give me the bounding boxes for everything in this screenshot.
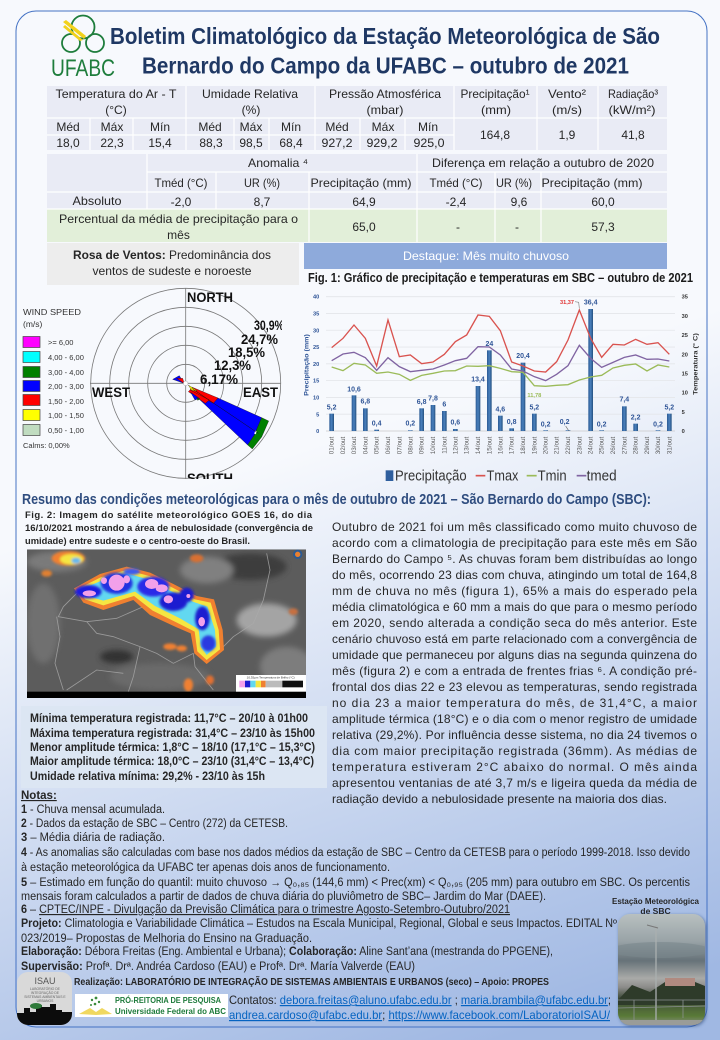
data labels: 0,6 — [450, 420, 460, 427]
day labels: 15/out — [486, 436, 493, 454]
icon: UFABC logo: UFABC — [51, 55, 115, 82]
day labels: 23/out — [576, 436, 583, 454]
day labels: 30/out — [655, 436, 662, 454]
line: Tmax — [332, 310, 669, 372]
table: anomalies: -2,0 — [171, 195, 192, 209]
table: monthly summary: 164,8 — [480, 128, 510, 142]
left axis: 5 — [316, 412, 319, 418]
table: monthly summary: (mm) — [481, 103, 511, 117]
table: monthly summary: 15,4 — [148, 136, 172, 150]
day labels: 02/out — [340, 436, 347, 454]
left axis: Precipitação (mm) — [304, 334, 310, 396]
table: monthly summary: Umidade Relativa — [202, 87, 298, 101]
text block: figure 2 caption — [25, 510, 313, 547]
text block: contacts: andrea.cardoso@ufabc.edu.br; https://www.facebook.com/LaboratorioISAU/ — [229, 1008, 611, 1022]
table: anomalies — [47, 154, 667, 242]
table: monthly summary: Méd — [325, 120, 349, 134]
table: monthly summary: (°C) — [105, 103, 127, 117]
day labels: 31/out — [666, 436, 673, 454]
text block: wind rose note: ventos de sudeste e noroeste — [92, 264, 252, 278]
wind rose dial: NORTH — [187, 290, 233, 305]
data labels: 36,4 — [584, 299, 598, 306]
legend: wind speed: WIND SPEED — [23, 307, 81, 317]
panel: temperature records: Mínima temperatura registrada: 11,7°C – 20/10 à 01h00 — [30, 713, 308, 725]
panel: temperature records: Umidade relativa mínima: 29,2% - 23/10 às 15h — [30, 771, 265, 783]
data labels: 0,2 — [560, 419, 570, 426]
legend: wind speed: 0,50 - 1,00 — [48, 426, 84, 435]
day labels: 01/out — [329, 436, 336, 454]
storm band — [74, 567, 224, 664]
icon: ISAU logo — [17, 972, 72, 1025]
panel: temperature records: Maior amplitude térmica: 18,0°C – 23/10 (31,4°C – 13,4°C) — [30, 756, 314, 768]
day labels — [329, 436, 673, 454]
table: monthly summary: 18,0 — [56, 136, 80, 150]
table: monthly summary: (kW/m²) — [608, 103, 656, 117]
text block: main analysis: apresentou ventanias de até 3,7 m/s e ligeira queda da média de — [332, 776, 697, 790]
icon: ISAU logo: ISAU — [34, 976, 56, 986]
table: anomalies: 60,0 — [591, 195, 615, 209]
table: monthly summary: Vento² — [548, 87, 586, 101]
text block: notes: à estação meteorológica da UFABC ter apenas dois anos de funcionamento. — [21, 862, 390, 874]
table: anomalies: - — [456, 220, 460, 234]
left axis: 15 — [313, 379, 319, 385]
legend: wind speed: 3,00 - 4,00 — [48, 368, 84, 377]
day labels: 27/out — [621, 436, 628, 454]
wind rose dial: 30,9% — [254, 318, 284, 333]
right axis: 20 — [682, 352, 688, 358]
text block: notes — [21, 790, 690, 916]
text block: main analysis: do mês, ocorrendo 23 dias com chuva, atingindo um total de 164,8 — [332, 568, 697, 582]
title: Bernardo do Campo da UFABC – outubro de 2021 — [142, 52, 629, 78]
right axis: 15 — [682, 372, 688, 378]
wind rose dial — [90, 288, 284, 486]
icon: ISAU logo: LABORATÓRIO DE — [30, 986, 61, 991]
right axis: 35 — [682, 295, 688, 301]
text block: station caption: de SBC — [640, 906, 671, 916]
text block: main analysis: temperatura estiveram 2°C abaixo do normal. O mês ainda — [332, 760, 697, 774]
table: anomalies: UR (%) — [244, 176, 280, 190]
text block: notes: 5 – Estimado em função do quantil: muito chuvoso → Q₀,₈₅ (144,6 mm) < Prec(xm) < Q₀,₉₅ (205 mm) para outubro em SBC. Os percentis — [21, 877, 690, 889]
text block: notes: 6 – CPTEC/INPE - Divulgação da Previsão Climática para o trimestre Agosto-Setembro-Outubro/2021 — [21, 904, 510, 916]
day labels: 19/out — [531, 436, 538, 454]
data labels: 6 — [442, 402, 446, 409]
chart: wind rose — [23, 288, 284, 486]
icon: ISAU logo: SISTEMAS AMBIENTAIS E — [24, 995, 66, 999]
table: monthly summary: Radiação³ — [608, 87, 658, 101]
chart legend: Tmin — [538, 469, 567, 485]
table: monthly summary: 929,2 — [366, 136, 398, 150]
day labels: 16/out — [497, 436, 504, 454]
table: anomalies: Anomalia ⁴ — [248, 156, 308, 170]
left axis: 10 — [313, 395, 319, 401]
table: monthly summary: Mín — [150, 120, 170, 134]
text block: wind rose note — [47, 243, 299, 285]
data labels: 20,4 — [516, 353, 530, 360]
table: monthly summary: Máx — [101, 120, 123, 134]
day labels: 04/out — [362, 436, 369, 454]
wind rose dial: 6,17% — [200, 372, 238, 387]
title: Boletim Climatológico da Estação Meteorológica de São — [110, 23, 660, 49]
table: monthly summary: 68,4 — [279, 136, 303, 150]
day labels: 13/out — [464, 436, 471, 454]
table: monthly summary: Méd — [198, 120, 222, 134]
text block: notes: 2 - Dados da estação de SBC – Centro (272) da CETESB. — [21, 818, 288, 830]
image: GOES 16 satellite — [27, 549, 313, 698]
icon: PROPES logo — [75, 994, 228, 1017]
left axis: 20 — [313, 362, 319, 368]
table: monthly summary: (mbar) — [366, 103, 404, 117]
day labels: 20/out — [543, 436, 550, 454]
legend: wind speed: >= 6,00 — [48, 338, 73, 347]
data labels: 6,8 — [360, 398, 370, 405]
legend: wind speed: 1,00 - 1,50 — [48, 411, 84, 420]
table: monthly summary: Temperatura do Ar - T — [56, 87, 177, 101]
data labels: 7,4 — [619, 397, 629, 404]
legend: wind speed: 4,00 - 6,00 — [48, 353, 84, 362]
data labels: 13,4 — [471, 377, 485, 384]
left axis: 25 — [313, 345, 319, 351]
day labels: 11/out — [441, 436, 448, 454]
chart: precipitation and temperatures — [304, 295, 700, 485]
icon: ISAU logo: URBANOS — [37, 999, 54, 1003]
day labels: 14/out — [475, 436, 482, 454]
text block: credits: Elaboração: Débora Freitas (Eng. Ambiental e Urbana); Colaboração: Aline Sant’ana (mestranda do PPGENE), — [21, 946, 553, 958]
table: anomalies: 65,0 — [352, 220, 376, 234]
table: anomalies: Tméd (°C) — [430, 176, 482, 190]
wind rose dial: 18,5% — [228, 345, 265, 360]
table: anomalies: 8,7 — [254, 195, 271, 209]
day labels: 25/out — [599, 436, 606, 454]
table: anomalies: Percentual da média de precipitação para o — [59, 212, 298, 226]
text block: main analysis: amplitude térmica (18°C) e o dia com o menor registro de umidade — [332, 712, 697, 726]
icon: PROPES logo: Universidade Federal do ABC — [115, 1007, 226, 1016]
data labels: 11,78 — [527, 393, 541, 399]
data labels: 0,2 — [405, 421, 415, 428]
day labels: 12/out — [452, 436, 459, 454]
precipitation bars — [329, 309, 672, 431]
right axis: 10 — [682, 391, 688, 397]
table: monthly summary: 88,3 — [199, 136, 223, 150]
wind rose dial: 12,3% — [214, 358, 251, 373]
table: anomalies: -2,4 — [446, 195, 467, 209]
table: monthly summary: Máx — [240, 120, 262, 134]
chart legend: tmed — [587, 469, 617, 485]
callout: highlight: Destaque: Mês muito chuvoso — [403, 249, 569, 263]
table: monthly summary: 925,0 — [414, 136, 445, 150]
day labels: 26/out — [610, 436, 617, 454]
text block: station caption — [612, 896, 699, 916]
data labels: 6,8 — [417, 399, 427, 406]
table: monthly summary: (m/s) — [552, 103, 582, 117]
table: anomalies: Diferença em relação a outubro de 2020 — [432, 156, 654, 170]
day labels: 08/out — [407, 436, 414, 454]
day labels: 06/out — [385, 436, 392, 454]
icon: PROPES logo: PRÓ-REITORIA DE PESQUISA — [115, 996, 221, 1005]
table: monthly summary: Precipitação¹ — [460, 87, 530, 101]
text block: station caption: Estação Meteorológica — [612, 896, 699, 906]
wind rose dial: SOUTH — [187, 471, 233, 486]
day labels: 21/out — [554, 436, 561, 454]
legend: wind speed: 1,50 - 2,00 — [48, 397, 84, 406]
legend: wind speed — [23, 307, 84, 450]
text block: contacts — [229, 993, 611, 1022]
left axis: 0 — [316, 429, 319, 435]
text block: main analysis: acordo com a climatologia de precipitação para este mês em São — [332, 536, 697, 550]
left axis: 30 — [313, 328, 319, 334]
legend: wind speed: Calms: 0,00% — [23, 441, 70, 450]
table: anomalies: - — [515, 220, 519, 234]
data labels: 0,2 — [597, 421, 607, 428]
title — [110, 23, 660, 78]
text block: main analysis: média climatológica e 60 mm a mais do que para o mesmo período — [332, 600, 697, 614]
text block: notes: 3 – Média diária de radiação. — [21, 832, 165, 844]
right axis — [682, 295, 700, 435]
data labels: 4,6 — [495, 406, 505, 413]
text block: main analysis: mês (figura 2) e com a entrada de frentes frias ⁶. A condição pré- — [332, 664, 697, 678]
image: GOES 16 satellite: 10,35µm Temperatura de Brilho (°C) — [247, 676, 295, 680]
chart legend — [386, 469, 617, 485]
text block: figure 2 caption: 16/10/2021 mostrando a área de nebulosidade (convergência de — [25, 523, 313, 534]
table: anomalies: 57,3 — [591, 220, 615, 234]
data labels — [327, 299, 674, 431]
text block: main analysis: em 2020, sendo alterada a condição seca do mês anterior. Este — [332, 616, 697, 630]
table: monthly summary: 98,5 — [239, 136, 263, 150]
right axis: 5 — [682, 410, 685, 416]
table: monthly summary: Méd — [56, 120, 80, 134]
left axis — [304, 295, 319, 435]
table: monthly summary: 927,2 — [322, 136, 353, 150]
table: monthly summary: Máx — [372, 120, 394, 134]
data labels: 0,2 — [653, 421, 663, 428]
data labels: 2,2 — [631, 414, 641, 421]
table: monthly summary: 1,9 — [559, 128, 576, 142]
text block: notes: Notas: — [21, 790, 57, 802]
text block: credits: 023/2019– Propostas de Melhoria do Ensino na Graduação. — [21, 933, 312, 945]
day labels: 24/out — [588, 436, 595, 454]
image: station photo — [610, 914, 710, 1025]
line: tmed — [332, 345, 669, 381]
text block: main analysis: relativa (29,2%). Por influência desse sistema, no dia 24 tivemos o — [332, 728, 697, 742]
text block: credits — [21, 918, 618, 988]
text block: main analysis: mm de chuva no mês (figura 1), 65% a mais do esperado pela — [332, 584, 697, 598]
right axis: Temperatura (° C) — [694, 333, 700, 395]
right axis: 25 — [682, 333, 688, 339]
text block: main analysis: cenário chuvoso está em parte relacionado com a convergência de — [332, 632, 697, 646]
table: anomalies: 64,9 — [352, 195, 376, 209]
text block: notes: 1 - Chuva mensal acumulada. — [21, 804, 165, 816]
text block: contacts: Contatos: debora.freitas@aluno.ufabc.edu.br ; maria.brambila@ufabc.edu.br; — [229, 993, 611, 1007]
table: monthly summary: Pressão Atmosférica — [329, 87, 441, 101]
text block: main analysis: Outubro de 2021 foi um mês classificado como muito chuvoso de — [332, 520, 697, 534]
text block: credits: Supervisão: Profª. Drª. Andréa Cardoso (EAU) e Profª. Drª. María Valverde (EAU) — [21, 961, 415, 973]
chart legend: Tmax — [487, 469, 519, 485]
right axis: 30 — [682, 314, 688, 320]
text block: main analysis: no dia 23 a maior temperatura do mês, de 31,4°C, a maior — [332, 696, 697, 710]
day labels: 18/out — [520, 436, 527, 454]
table: anomalies: Precipitação (mm) — [310, 176, 412, 190]
text block: main analysis: Bernardo do Campo ⁵. As chuvas foram bem distribuídas ao longo — [332, 552, 697, 566]
grid lines — [326, 297, 675, 431]
table: monthly summary: 41,8 — [621, 128, 645, 142]
day labels: 22/out — [565, 436, 572, 454]
icon: ISAU logo: INTEGRAÇÃO DE — [31, 990, 60, 995]
panel: temperature records: Menor amplitude térmica: 1,8°C – 18/10 (17,1°C – 15,3°C) — [30, 742, 315, 754]
table: monthly summary: 22,3 — [100, 136, 124, 150]
chart legend: Precipitação — [395, 469, 467, 485]
data labels: 0,2 — [541, 421, 551, 428]
data labels: 7,8 — [428, 396, 438, 403]
table: monthly summary: (%) — [242, 103, 260, 117]
day labels: 10/out — [430, 436, 437, 454]
day labels: 09/out — [419, 436, 426, 454]
table: anomalies: UR (%) — [496, 176, 532, 190]
data labels: 5,2 — [664, 404, 674, 411]
table: monthly summary: Mín — [418, 120, 438, 134]
text block: wind rose note: Rosa de Ventos: Predominância dos — [73, 248, 271, 262]
text block: credits: Projeto: Climatologia e Variabilidade Climática – Estudos na Escala Municipal, Regional, Global e seus Impactos. EDITAL Nº — [21, 918, 618, 930]
text block: main analysis — [332, 520, 697, 806]
data labels: 5,2 — [529, 404, 539, 411]
data labels: 0,8 — [507, 419, 517, 426]
right axis: 0 — [682, 429, 685, 435]
icon: UFABC logo — [51, 16, 115, 82]
day labels: 28/out — [633, 436, 640, 454]
table: anomalies: Precipitação (mm) — [542, 176, 642, 190]
panel: temperature records — [21, 706, 327, 788]
day labels: 05/out — [374, 436, 381, 454]
data labels: 24 — [485, 341, 493, 348]
left axis: 40 — [313, 295, 319, 301]
callout: highlight — [304, 243, 667, 269]
data labels: 10,6 — [347, 386, 361, 393]
data labels: 0,4 — [372, 420, 382, 427]
text block: main analysis: frontal dos dias 22 e 23 elevou as temperaturas, sendo registrada — [332, 680, 697, 694]
table: monthly summary — [47, 86, 667, 150]
text block: main analysis: dia com maior precipitação registrada (36mm). As médias de — [332, 744, 697, 758]
table: anomalies: Absoluto — [72, 194, 122, 208]
legend: wind speed: (m/s) — [23, 319, 43, 329]
day labels: 29/out — [644, 436, 651, 454]
table: anomalies: mês — [167, 228, 190, 242]
day labels: 17/out — [509, 436, 516, 454]
panel: temperature records: Máxima temperatura registrada: 31,4°C – 23/10 às 15h00 — [30, 728, 315, 740]
table: monthly summary: Mín — [281, 120, 301, 134]
line: Tmin — [332, 363, 669, 386]
day labels: 07/out — [396, 436, 403, 454]
wind rose dial: WEST — [92, 385, 131, 400]
text block: main analysis: umidade que permaneceu por alguns dias na segunda quinzena do — [332, 648, 697, 662]
legend: wind speed: 2,00 - 3,00 — [48, 382, 84, 391]
data labels: 31,37 — [560, 300, 574, 306]
table: anomalies: Tméd (°C) — [154, 176, 208, 190]
wind rose dial: 24,7% — [241, 332, 278, 347]
data labels: 5,2 — [327, 404, 337, 411]
left axis: 35 — [313, 311, 319, 317]
table: anomalies: 9,6 — [511, 195, 528, 209]
text block: credits: Realização: LABORATÓRIO DE INTEGRAÇÃO DE SISTEMAS AMBIENTAIS E URBANOS (seco) – Apoio: PROPES — [74, 975, 549, 988]
text block: figure 2 caption: Fig. 2: Imagem do satélite meteorológico GOES 16, do dia — [25, 510, 313, 521]
day labels: 03/out — [351, 436, 358, 454]
text block: figure 2 caption: umidade) entre sudeste e o centro-oeste do Brasil. — [25, 536, 250, 547]
wind rose dial: EAST — [243, 385, 279, 400]
text block: main analysis: radiação devido a nebulosidade presente na maioria dos dias. — [332, 792, 667, 806]
text block: notes: mensais foram calculados a partir de dados de chuva diária do pluviômetro de SBC– Jardim do Mar (DAEE). — [21, 891, 546, 903]
